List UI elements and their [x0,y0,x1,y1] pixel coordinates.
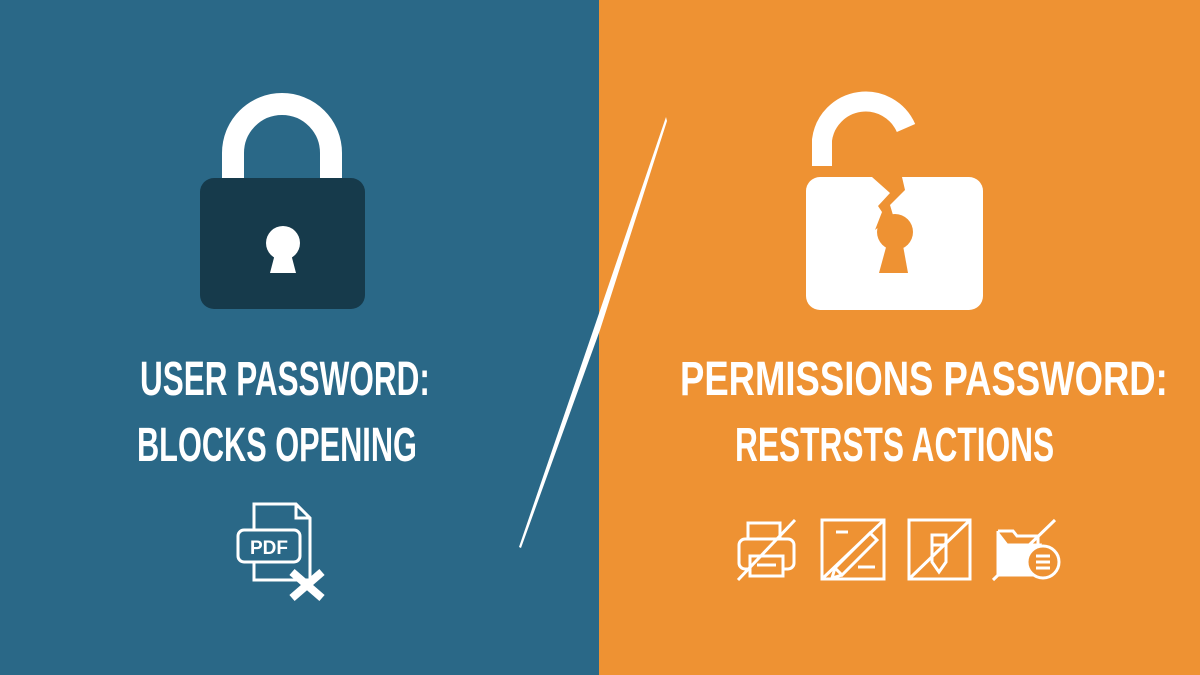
divider slash [519,117,667,548]
icons: restricted actions [738,520,1059,580]
heading: user password: BLOCKS OPENING [137,419,417,472]
icon: pdf blocked: PDF [250,538,288,559]
icon: folder [993,520,1059,580]
heading: permissions password [680,353,1168,472]
icon: broken open lock [806,102,983,310]
heading: user password [137,353,430,472]
heading: user password: USER PASSWORD: [140,353,430,406]
icon: pencil [909,520,970,579]
heading: permissions password: RESTRSTS ACTIONS [735,419,1054,472]
icon: print [738,520,795,580]
icon: closed lock [200,104,365,309]
icon: pdf blocked [238,504,322,598]
icon: edit [822,520,884,579]
heading: permissions password: PERMISSIONS PASSWORD: [680,353,1168,406]
